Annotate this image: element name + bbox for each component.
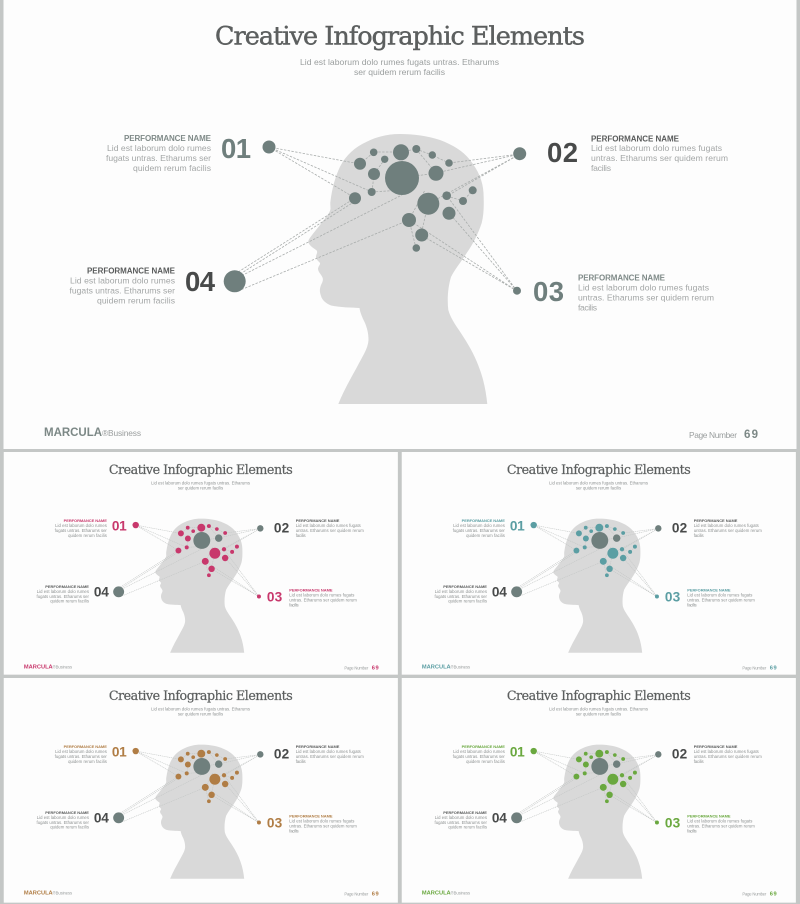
label 04: fugats untras. Etharums ser [435, 594, 488, 599]
page number: 69 [770, 892, 777, 898]
label 02 [274, 518, 364, 538]
label 02 [547, 134, 728, 173]
label 02: 02 [672, 747, 688, 762]
brain nodes [349, 144, 477, 252]
page number: Page Number [344, 892, 369, 897]
label 01: Lid est laborum dolo rumes [55, 749, 107, 754]
label 03: facilis [289, 828, 299, 833]
label 04: quidem rerum facilis [448, 825, 487, 830]
node 02 [513, 147, 526, 160]
label 01: PERFORMANCE NAME [462, 518, 505, 523]
label 03: untras. Etharums ser quidem rerum [578, 292, 714, 302]
label 03 [665, 813, 755, 833]
label 02 [672, 744, 762, 764]
brand footer: ®Business [53, 665, 72, 670]
node 02 [257, 751, 264, 758]
label 01: fugats untras. Etharums ser [453, 754, 505, 759]
label 02: facilis [591, 163, 611, 173]
node 04 [511, 812, 522, 823]
node 03 [513, 287, 521, 295]
page number: Page Number [344, 666, 369, 671]
brand footer [24, 665, 72, 671]
label 04 [37, 584, 109, 604]
label 02: Lid est laborum dolo rumes fugats [296, 749, 361, 754]
label 03: untras. Etharums ser quidem rerum [687, 597, 755, 602]
head silhouette [155, 745, 244, 879]
label 01: PERFORMANCE NAME [124, 134, 212, 143]
subtitle [549, 480, 648, 490]
brand footer [44, 427, 141, 439]
panel: teal variant [402, 452, 796, 675]
head silhouette [308, 134, 487, 404]
subtitle [549, 706, 648, 716]
label 03 [267, 587, 357, 607]
label 03: Lid est laborum dolo rumes fugats [687, 818, 752, 823]
label 01: fugats untras. Etharums ser [55, 528, 107, 533]
label 03 [267, 813, 357, 833]
label 03: 03 [665, 590, 681, 605]
label 04: PERFORMANCE NAME [87, 266, 176, 275]
label 01: PERFORMANCE NAME [64, 744, 107, 749]
label 03: untras. Etharums ser quidem rerum [687, 823, 755, 828]
label 04: fugats untras. Etharums ser [37, 820, 90, 825]
label 04: PERFORMANCE NAME [45, 810, 89, 815]
label 02: 02 [672, 521, 688, 536]
connector lines [517, 525, 658, 597]
label 01: PERFORMANCE NAME [64, 518, 107, 523]
label 03: untras. Etharums ser quidem rerum [289, 597, 357, 602]
subtitle: ser quidem rerum facilis [354, 67, 445, 77]
label 01: quidem rerum facilis [68, 759, 107, 764]
label 02: 02 [274, 521, 290, 536]
subtitle [300, 57, 499, 77]
label 02: untras. Etharums ser quidem rerum [694, 528, 762, 533]
label 04: 04 [94, 585, 109, 600]
label 03: PERFORMANCE NAME [578, 273, 666, 282]
label 04: Lid est laborum dolo rumes [37, 815, 89, 820]
panel: pink variant [4, 452, 398, 675]
page number: Page Number [742, 892, 767, 897]
label 03: Lid est laborum dolo rumes fugats [578, 282, 709, 292]
label 01 [106, 133, 251, 173]
label 01: Lid est laborum dolo rumes [453, 523, 505, 528]
panel: brown variant [4, 678, 398, 903]
label 04: 04 [492, 585, 507, 600]
label 02: Lid est laborum dolo rumes fugats [694, 523, 759, 528]
brand footer [24, 891, 72, 897]
label 03: facilis [687, 828, 697, 833]
subtitle [151, 480, 250, 490]
node 02 [257, 525, 264, 532]
label 04: PERFORMANCE NAME [45, 584, 89, 589]
brand footer: MARCULA [24, 665, 53, 671]
label 03: untras. Etharums ser quidem rerum [289, 823, 357, 828]
label 04: quidem rerum facilis [50, 825, 89, 830]
label 02: untras. Etharums ser quidem rerum [694, 754, 762, 759]
brain nodes [573, 750, 637, 803]
label 02: Lid est laborum dolo rumes fugats [694, 749, 759, 754]
label 03 [665, 587, 755, 607]
label 04: Lid est laborum dolo rumes [435, 589, 487, 594]
node 03 [655, 820, 659, 824]
label 01 [453, 518, 525, 538]
label 01: fugats untras. Etharums ser [55, 754, 107, 759]
head silhouette [553, 519, 642, 653]
label 04: 04 [492, 811, 507, 826]
subtitle: ser quidem rerum facilis [178, 711, 223, 716]
brain nodes [175, 750, 239, 803]
brand footer: ®Business [451, 891, 470, 896]
label 04: quidem rerum facilis [448, 599, 487, 604]
brand footer: MARCULA [422, 891, 451, 897]
label 03: 03 [267, 816, 283, 831]
label 01: quidem rerum facilis [133, 163, 211, 173]
label 03: Lid est laborum dolo rumes fugats [687, 592, 752, 597]
label 04: PERFORMANCE NAME [443, 584, 487, 589]
label 02: untras. Etharums ser quidem rerum [591, 153, 728, 163]
title: Creative Infographic Elements [215, 22, 585, 52]
node 01 [530, 748, 537, 754]
subtitle: Lid est laborum dolo rumes fugats untras. Etharums [549, 706, 648, 711]
label 02: untras. Etharums ser quidem rerum [296, 528, 364, 533]
label 03: Lid est laborum dolo rumes fugats [289, 592, 354, 597]
subtitle: Lid est laborum dolo rumes fugats untras. Etharums [300, 57, 499, 67]
node 03 [257, 594, 261, 598]
label 02: facilis [296, 533, 306, 538]
label 04: fugats untras. Etharums ser [70, 285, 175, 295]
node 03 [257, 820, 261, 824]
node 03 [655, 594, 659, 598]
connector lines [119, 525, 260, 597]
label 04 [37, 810, 109, 830]
label 03: PERFORMANCE NAME [687, 587, 731, 592]
label 02: PERFORMANCE NAME [296, 744, 340, 749]
title: Creative Infographic Elements [109, 462, 293, 477]
label 02: PERFORMANCE NAME [296, 518, 340, 523]
label 04: Lid est laborum dolo rumes [70, 275, 175, 285]
label 04: PERFORMANCE NAME [443, 810, 487, 815]
label 04: Lid est laborum dolo rumes [435, 815, 487, 820]
label 04: quidem rerum facilis [50, 599, 89, 604]
brand footer [422, 665, 470, 671]
label 03: facilis [687, 602, 697, 607]
brand footer [422, 891, 470, 897]
label 04 [435, 810, 507, 830]
label 01: 01 [112, 519, 127, 534]
node 02 [655, 525, 662, 532]
page number [742, 892, 777, 898]
label 01: PERFORMANCE NAME [462, 744, 505, 749]
label 03: PERFORMANCE NAME [687, 813, 731, 818]
node 04 [113, 812, 124, 823]
subtitle: Lid est laborum dolo rumes fugats untras. Etharums [151, 706, 250, 711]
page number [344, 892, 379, 898]
label 04: Lid est laborum dolo rumes [37, 589, 89, 594]
connector lines [517, 751, 658, 823]
label 01: 01 [221, 133, 251, 164]
label 03: PERFORMANCE NAME [289, 587, 333, 592]
label 02: facilis [296, 759, 306, 764]
label 03: 03 [665, 816, 681, 831]
page number: 69 [770, 666, 777, 672]
brand footer: MARCULA [422, 665, 451, 671]
subtitle: Lid est laborum dolo rumes fugats untras. Etharums [549, 480, 648, 485]
label 01: Lid est laborum dolo rumes [55, 523, 107, 528]
title: Creative Infographic Elements [109, 688, 293, 703]
node 01 [132, 748, 139, 754]
label 02: Lid est laborum dolo rumes fugats [296, 523, 361, 528]
label 01 [55, 744, 127, 764]
node 04 [224, 270, 246, 292]
label 02 [672, 518, 762, 538]
label 01: 01 [112, 745, 127, 760]
label 02: facilis [694, 759, 704, 764]
page number: 69 [372, 892, 379, 898]
label 02: facilis [694, 533, 704, 538]
label 04 [70, 266, 216, 305]
page number: Page Number [689, 430, 737, 440]
page number [689, 429, 758, 441]
label 02: Lid est laborum dolo rumes fugats [591, 143, 722, 153]
label 01: 01 [510, 519, 525, 534]
label 01: quidem rerum facilis [466, 759, 505, 764]
label 02: PERFORMANCE NAME [694, 518, 738, 523]
label 01: quidem rerum facilis [68, 533, 107, 538]
title: Creative Infographic Elements [507, 688, 691, 703]
label 01: 01 [510, 745, 525, 760]
label 02: 02 [274, 747, 290, 762]
panel: main slide [4, 0, 796, 449]
label 02 [274, 744, 364, 764]
label 03: facilis [578, 302, 597, 312]
page number: Page Number [742, 666, 767, 671]
connector lines [119, 751, 260, 823]
node 01 [530, 522, 537, 528]
page number [742, 666, 777, 672]
brain nodes [175, 524, 239, 577]
label 01: Lid est laborum dolo rumes [453, 749, 505, 754]
label 02: PERFORMANCE NAME [591, 134, 680, 143]
label 03: facilis [289, 602, 299, 607]
subtitle: ser quidem rerum facilis [576, 485, 621, 490]
panel: green variant [402, 678, 796, 903]
label 01: quidem rerum facilis [466, 533, 505, 538]
brand footer: MARCULA [44, 427, 102, 439]
label 02: 02 [547, 137, 578, 168]
node 02 [655, 751, 662, 758]
subtitle: Lid est laborum dolo rumes fugats untras. Etharums [151, 480, 250, 485]
brand footer: ®Business [451, 665, 470, 670]
label 01 [453, 744, 525, 764]
label 04: 04 [94, 811, 109, 826]
head silhouette [155, 519, 244, 653]
label 03: PERFORMANCE NAME [289, 813, 333, 818]
node 04 [113, 586, 124, 597]
subtitle: ser quidem rerum facilis [178, 485, 223, 490]
title: Creative Infographic Elements [507, 462, 691, 477]
label 03: 03 [533, 276, 564, 307]
page number [344, 666, 379, 672]
brand footer: ®Business [53, 891, 72, 896]
label 01: fugats untras. Etharums ser [106, 153, 211, 163]
node 01 [132, 522, 139, 528]
label 04: quidem rerum facilis [97, 295, 175, 305]
page number: 69 [744, 429, 758, 441]
subtitle [151, 706, 250, 716]
brand footer: ®Business [102, 428, 141, 438]
label 02: untras. Etharums ser quidem rerum [296, 754, 364, 759]
dashed connector lines [235, 147, 520, 291]
label 04 [435, 584, 507, 604]
label 03 [533, 273, 714, 312]
label 04: fugats untras. Etharums ser [37, 594, 90, 599]
subtitle: ser quidem rerum facilis [576, 711, 621, 716]
label 04: fugats untras. Etharums ser [435, 820, 488, 825]
node 01 [262, 140, 276, 154]
node 04 [511, 586, 522, 597]
label 01: fugats untras. Etharums ser [453, 528, 505, 533]
label 02: PERFORMANCE NAME [694, 744, 738, 749]
head silhouette [553, 745, 642, 879]
label 03: 03 [267, 590, 283, 605]
brand footer: MARCULA [24, 891, 53, 897]
label 01 [55, 518, 127, 538]
label 04: 04 [185, 266, 216, 297]
page number: 69 [372, 666, 379, 672]
label 01: Lid est laborum dolo rumes [107, 143, 211, 153]
brain nodes [573, 524, 637, 577]
label 03: Lid est laborum dolo rumes fugats [289, 818, 354, 823]
